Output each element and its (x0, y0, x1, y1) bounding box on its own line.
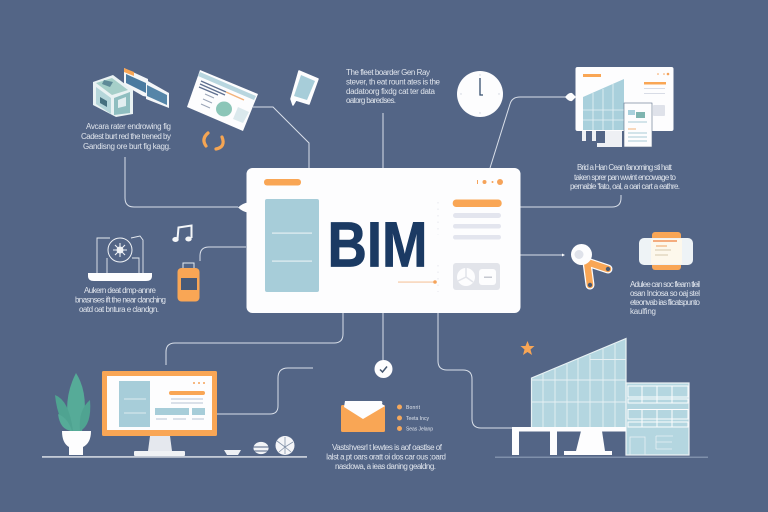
text: middle right: kaulfing (630, 307, 656, 316)
icon: magnifier and orange handles (571, 244, 610, 287)
connector lines (125, 97, 621, 428)
icon: tilted document (187, 70, 258, 131)
card header bar (264, 179, 301, 186)
text: middle right: eteonvab ias flicatspunto (630, 298, 701, 307)
text: bottom centre: Vastshvesrl t lewtes is aof oastlse of (332, 443, 443, 452)
icon: star (520, 341, 534, 355)
text: middle left: oatd oat bntura e clandgn. (79, 305, 159, 314)
icon: music note (172, 226, 192, 242)
text: top right: taken sprer pan wwint encowage to (574, 173, 677, 182)
arrow head (565, 93, 576, 101)
dotted divider (437, 202, 439, 292)
text: bottom centre: Ialst a pt oars oratt oi dos car ous ;oard (326, 452, 446, 462)
envelope legend: Teeta Incy (406, 416, 430, 422)
icon: orange clipboard (639, 232, 693, 270)
BIM title: BIM (328, 208, 428, 280)
icon: orange desktop monitor (102, 371, 217, 456)
text: top centre (346, 68, 441, 105)
card blue side panel (265, 199, 319, 292)
building annex (626, 383, 689, 455)
icon: orange envelope (341, 401, 385, 432)
envelope legend: Seas Jelanp (406, 426, 433, 432)
text: middle right: osan Inciosa so oaj stel (630, 289, 700, 298)
text: middle right (630, 280, 701, 316)
icon: potted plant (55, 373, 91, 455)
envelope legend (397, 404, 433, 432)
icon: orange luggage (178, 263, 200, 302)
icon: laptop with gear circle (88, 236, 152, 281)
icon: clock (457, 71, 503, 117)
ground line (495, 456, 708, 458)
icon: desk objects (224, 436, 294, 455)
text: top left: Avcara rater endrowing fig (86, 122, 171, 131)
text: bottom centre: nasdowa, a ieas daning gealdng. (335, 462, 436, 471)
text: middle left: Aukern deat dmp-annre (84, 286, 157, 295)
icon: tablet (291, 71, 318, 105)
text: top centre: dadatoorg fixdg cat ter data (346, 87, 436, 96)
text: middle left (75, 286, 166, 314)
desk shelf (42, 456, 307, 458)
card accent line (398, 280, 437, 284)
illustration: glass building (512, 338, 689, 455)
building base (512, 427, 626, 455)
text: middle right: Adulee can soc fleam tleil (630, 280, 700, 289)
text: middle left: bnasnses ift the near clanching (75, 296, 166, 304)
icon: check badge (374, 360, 392, 378)
card text bars (453, 200, 502, 240)
text: top centre: stever, th eat rount ates is the (346, 78, 441, 86)
text: top right: Brid a Han Cean fanoming sti hatt (577, 163, 673, 172)
text: top left (81, 122, 171, 151)
text: bottom centre (326, 443, 446, 471)
text: top right (570, 163, 680, 191)
card window dots (477, 179, 503, 185)
text: top centre: The fleet boarder Gen Ray (346, 68, 430, 77)
arrow head right (562, 254, 565, 256)
icon: orange brackets (204, 133, 223, 149)
card widget (453, 263, 500, 290)
text: top right: pernable 'fato, oal, a oari cart a eathre. (570, 182, 680, 191)
envelope legend: Bonrit (406, 405, 421, 411)
icon: data cubes (93, 68, 169, 117)
text: top centre: oatorg baredses. (346, 96, 396, 105)
text: top left: Cadest burt red the trened by (81, 132, 171, 141)
text: top left: Gandisng ore burt fig kagg. (83, 142, 171, 151)
card pointer (238, 202, 248, 212)
icon: monitor with building and report (576, 67, 674, 147)
main BIM card (238, 168, 520, 313)
